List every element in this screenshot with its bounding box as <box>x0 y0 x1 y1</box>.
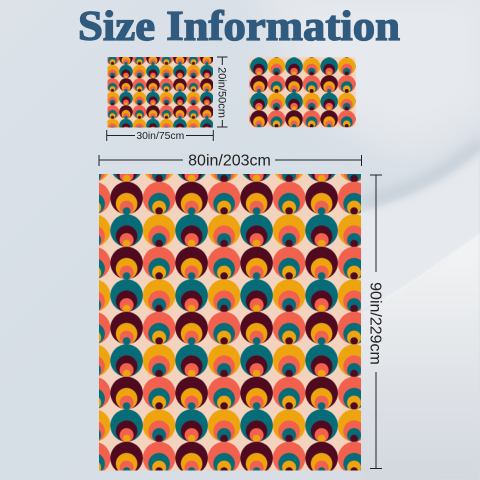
width dimension: 30in/75cm: 30in/75cm <box>136 131 184 142</box>
height dimension: 90in/229cm <box>366 175 384 468</box>
width dimension: 80in/203cm: 80in/203cm <box>188 152 271 170</box>
blanket pattern, 80 by 90 inches <box>99 174 361 470</box>
panel: medium pillow <box>249 57 356 127</box>
height dimension: 20in/50cm: 20in/50cm <box>216 67 228 118</box>
pillow pattern, 30 by 20 inches <box>108 57 213 128</box>
width dimension: 80in/203cm <box>99 152 362 170</box>
title: Size Information <box>78 4 400 50</box>
height dimension: 90in/229cm: 90in/229cm <box>366 282 384 365</box>
panel: small pillow with dimensions <box>107 57 228 142</box>
panel: blanket with dimensions <box>99 152 384 470</box>
